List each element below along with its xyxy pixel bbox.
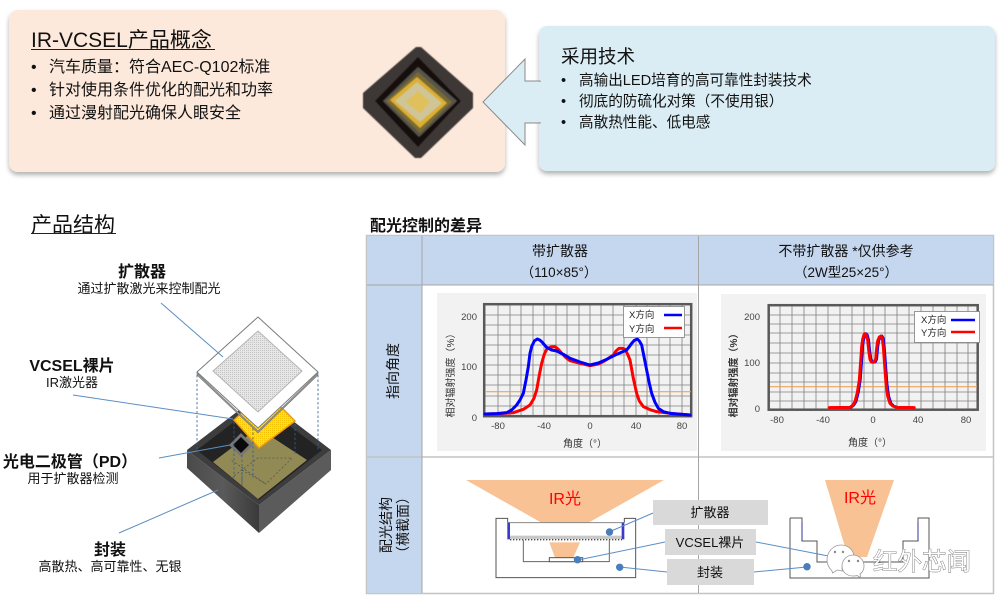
text block: concept bullets bbox=[31, 58, 273, 122]
legend: Y方向 bbox=[921, 327, 946, 339]
label: package box bbox=[667, 559, 754, 585]
heading: light distribution difference: 配光控制的差异 bbox=[370, 216, 482, 235]
package body bbox=[187, 395, 331, 533]
diagram: cross-section without diffuser bbox=[790, 480, 929, 578]
header: without diffuser: （2W型25×25°） bbox=[794, 265, 898, 280]
text block: technology bullets: 高输出LED培育的高可靠性封装技术 bbox=[579, 72, 812, 89]
label: VCSEL die bbox=[29, 356, 115, 390]
diagram: cross-section with diffuser: IR光 bbox=[549, 490, 581, 508]
panel: adopted technology bbox=[483, 26, 995, 171]
label: photodiode bbox=[3, 452, 137, 486]
axis labels: 0 bbox=[870, 415, 876, 426]
label: photodiode: 光电二极管（PD） bbox=[3, 452, 137, 471]
heading: product structure: 产品结构 bbox=[31, 214, 115, 237]
table: light distribution comparison bbox=[366, 236, 994, 594]
arrow: technology into product bbox=[483, 59, 542, 145]
text block: technology bullets: • bbox=[561, 73, 566, 89]
axis labels: 相对辐射强度（%） bbox=[727, 329, 740, 417]
text block: technology bullets: • bbox=[561, 115, 566, 131]
label: package bbox=[38, 541, 182, 574]
callout labels with leader lines bbox=[574, 500, 851, 585]
label: diffuser bbox=[77, 262, 221, 296]
text block: technology bullets: 高散热性能、低电感 bbox=[579, 114, 710, 131]
label: diffuser: 扩散器 bbox=[118, 262, 166, 281]
label: photodiode: 用于扩散器检测 bbox=[27, 471, 119, 486]
legend: X方向 bbox=[629, 309, 654, 321]
header: without diffuser bbox=[778, 243, 914, 280]
row label: structure: （横截面） bbox=[395, 490, 411, 560]
label: package box: 封装 bbox=[697, 565, 723, 580]
diagram: exploded package bbox=[187, 317, 331, 533]
heading: adopted technology: 采用技术 bbox=[561, 46, 635, 67]
label: VCSEL box: VCSEL裸片 bbox=[676, 535, 744, 550]
diagram: cross-section without diffuser: IR光 bbox=[844, 489, 876, 507]
label: diffuser box bbox=[653, 500, 768, 525]
text block: concept bullets: • bbox=[31, 105, 37, 122]
legend: Y方向 bbox=[629, 323, 654, 335]
axis labels: 200 bbox=[461, 312, 477, 323]
dashed guide lines bbox=[197, 375, 318, 484]
axis labels: 40 bbox=[913, 415, 923, 426]
watermark: WeChat logo and account name bbox=[827, 545, 971, 578]
axis labels bbox=[444, 312, 687, 450]
legend: X方向 bbox=[921, 314, 946, 326]
legend bbox=[914, 312, 980, 342]
text block: concept bullets: 针对使用条件优化的配光和功率 bbox=[49, 81, 273, 99]
row label: directivity: 指向角度 bbox=[385, 343, 401, 399]
text block: concept bullets: 汽车质量：符合AEC-Q102标准 bbox=[49, 58, 270, 76]
text block: technology bullets: 彻底的防硫化对策（不使用银） bbox=[579, 93, 783, 110]
axis labels: 0 bbox=[755, 404, 760, 415]
diagram: cross-section with diffuser bbox=[466, 480, 664, 578]
axis labels: 100 bbox=[744, 358, 760, 369]
label: diffuser: 通过扩散激光来控制配光 bbox=[77, 281, 221, 296]
chart: with diffuser bbox=[437, 293, 697, 451]
axis labels: 100 bbox=[461, 362, 477, 373]
text block: concept bullets: 通过漫射配光确保人眼安全 bbox=[49, 104, 241, 122]
axis labels bbox=[727, 312, 971, 449]
axis labels: 200 bbox=[744, 312, 760, 323]
axis labels: -40 bbox=[537, 421, 551, 432]
row label: structure bbox=[378, 490, 411, 560]
legend bbox=[624, 306, 684, 338]
axis labels: 角度（°） bbox=[563, 437, 607, 450]
text block: concept bullets: • bbox=[31, 82, 37, 99]
header: with diffuser: 带扩散器 bbox=[532, 243, 588, 259]
axis labels: -80 bbox=[770, 415, 784, 426]
header: with diffuser: （110×85°） bbox=[521, 265, 597, 280]
axis labels: -40 bbox=[816, 415, 830, 426]
watermark: WeChat logo and account name: 红外芯闻 bbox=[873, 548, 971, 576]
axis labels: 40 bbox=[631, 421, 641, 432]
axis labels: 80 bbox=[961, 415, 971, 426]
axis labels: 0 bbox=[472, 413, 477, 424]
label: package: 封装 bbox=[94, 541, 126, 559]
label: VCSEL die: IR激光器 bbox=[46, 375, 98, 390]
label: diffuser box: 扩散器 bbox=[690, 505, 730, 520]
row label: structure: 配光结构 bbox=[378, 497, 394, 553]
curves bbox=[485, 339, 690, 415]
text block: technology bullets: • bbox=[561, 94, 566, 110]
text block: concept bullets: • bbox=[31, 59, 37, 76]
diffuser bbox=[197, 317, 318, 433]
header: with diffuser bbox=[521, 243, 597, 280]
axis labels: 角度（°） bbox=[848, 436, 892, 449]
text block: technology bullets bbox=[561, 72, 812, 131]
VCSEL die bbox=[234, 398, 295, 448]
icon: VCSEL chip photo bbox=[363, 47, 473, 158]
grid bbox=[769, 306, 977, 409]
axis labels: 80 bbox=[677, 421, 687, 432]
header: without diffuser: 不带扩散器 *仅供参考 bbox=[778, 243, 914, 259]
callout lines bbox=[73, 303, 233, 533]
axis labels: -80 bbox=[491, 421, 505, 432]
chart: without diffuser bbox=[721, 294, 986, 451]
label: package: 高散热、高可靠性、无银 bbox=[38, 559, 182, 574]
axis labels: 0 bbox=[587, 421, 593, 432]
label: VCSEL die: VCSEL裸片 bbox=[29, 356, 115, 375]
panel: product concept bbox=[9, 10, 505, 172]
label: VCSEL box bbox=[665, 529, 756, 555]
curves bbox=[829, 334, 914, 408]
heading: product concept: IR-VCSEL产品概念 bbox=[31, 29, 212, 52]
icon: photodiode bbox=[229, 433, 253, 457]
axis labels: 相对辐射强度（%） bbox=[444, 329, 457, 417]
grid bbox=[484, 304, 691, 416]
